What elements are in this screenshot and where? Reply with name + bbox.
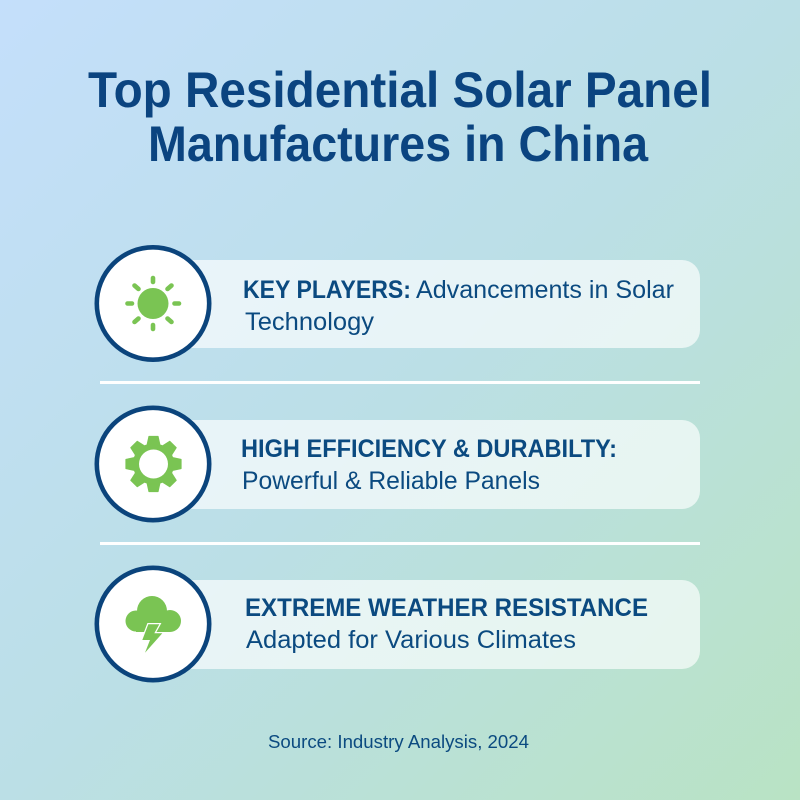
title: Manufactures in China bbox=[148, 116, 649, 172]
title bbox=[88, 62, 712, 172]
icon: sun bbox=[97, 247, 209, 360]
text: extreme weather: EXTREME WEATHER RESISTANCE bbox=[245, 594, 648, 622]
panel: extreme weather bbox=[97, 568, 700, 680]
card background bbox=[153, 420, 700, 509]
panel: key players: Advancements in Solar bbox=[416, 276, 674, 304]
panel: high efficiency: Powerful & Reliable Panels bbox=[242, 467, 540, 495]
title: Top Residential Solar Panel bbox=[88, 62, 712, 118]
panel: key players bbox=[97, 247, 700, 360]
card background bbox=[153, 260, 700, 348]
icon: storm cloud bbox=[97, 568, 209, 680]
source note: Source: Industry Analysis, 2024 bbox=[268, 732, 529, 752]
divider bbox=[100, 381, 700, 384]
card background bbox=[153, 580, 700, 669]
icon: gear bbox=[97, 408, 209, 520]
divider bbox=[100, 542, 700, 545]
text: key players: KEY PLAYERS: bbox=[243, 276, 411, 304]
text: high efficiency: HIGH EFFICIENCY & DURABILTY: bbox=[241, 435, 617, 463]
panel: extreme weather: Adapted for Various Climates bbox=[246, 626, 576, 654]
panel: key players: Technology bbox=[245, 308, 375, 336]
panel: high efficiency bbox=[97, 408, 700, 520]
